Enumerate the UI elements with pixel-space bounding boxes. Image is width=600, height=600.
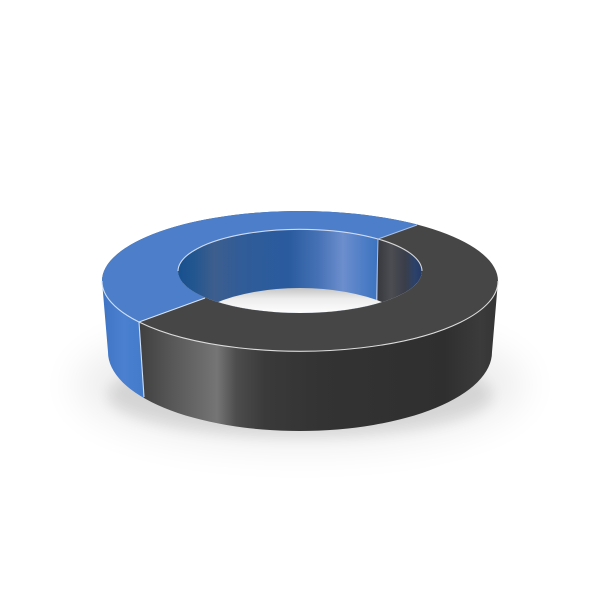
blue top segment [102, 211, 417, 322]
left rim highlight [102, 281, 139, 322]
dark inner wall [378, 240, 422, 304]
dark top segment [102, 211, 498, 351]
top face [102, 211, 498, 351]
seam left top [139, 298, 205, 322]
inner rim highlight blue [178, 229, 378, 271]
seam right top [378, 225, 417, 239]
blue inner wall [178, 230, 378, 313]
white edge highlights [102, 225, 498, 397]
front rim highlight [139, 281, 498, 351]
3D donut chart [83, 211, 517, 448]
inner hole wall [178, 230, 422, 313]
outer side wall [102, 281, 498, 431]
ground shadow [75, 323, 525, 447]
white floor seen through the hole [218, 288, 382, 313]
inner wall seam [376, 239, 378, 300]
seam outer vertical [139, 322, 144, 397]
inner rim highlight dark [378, 239, 422, 271]
dark side segment [140, 288, 498, 431]
blue side segment [102, 288, 144, 398]
